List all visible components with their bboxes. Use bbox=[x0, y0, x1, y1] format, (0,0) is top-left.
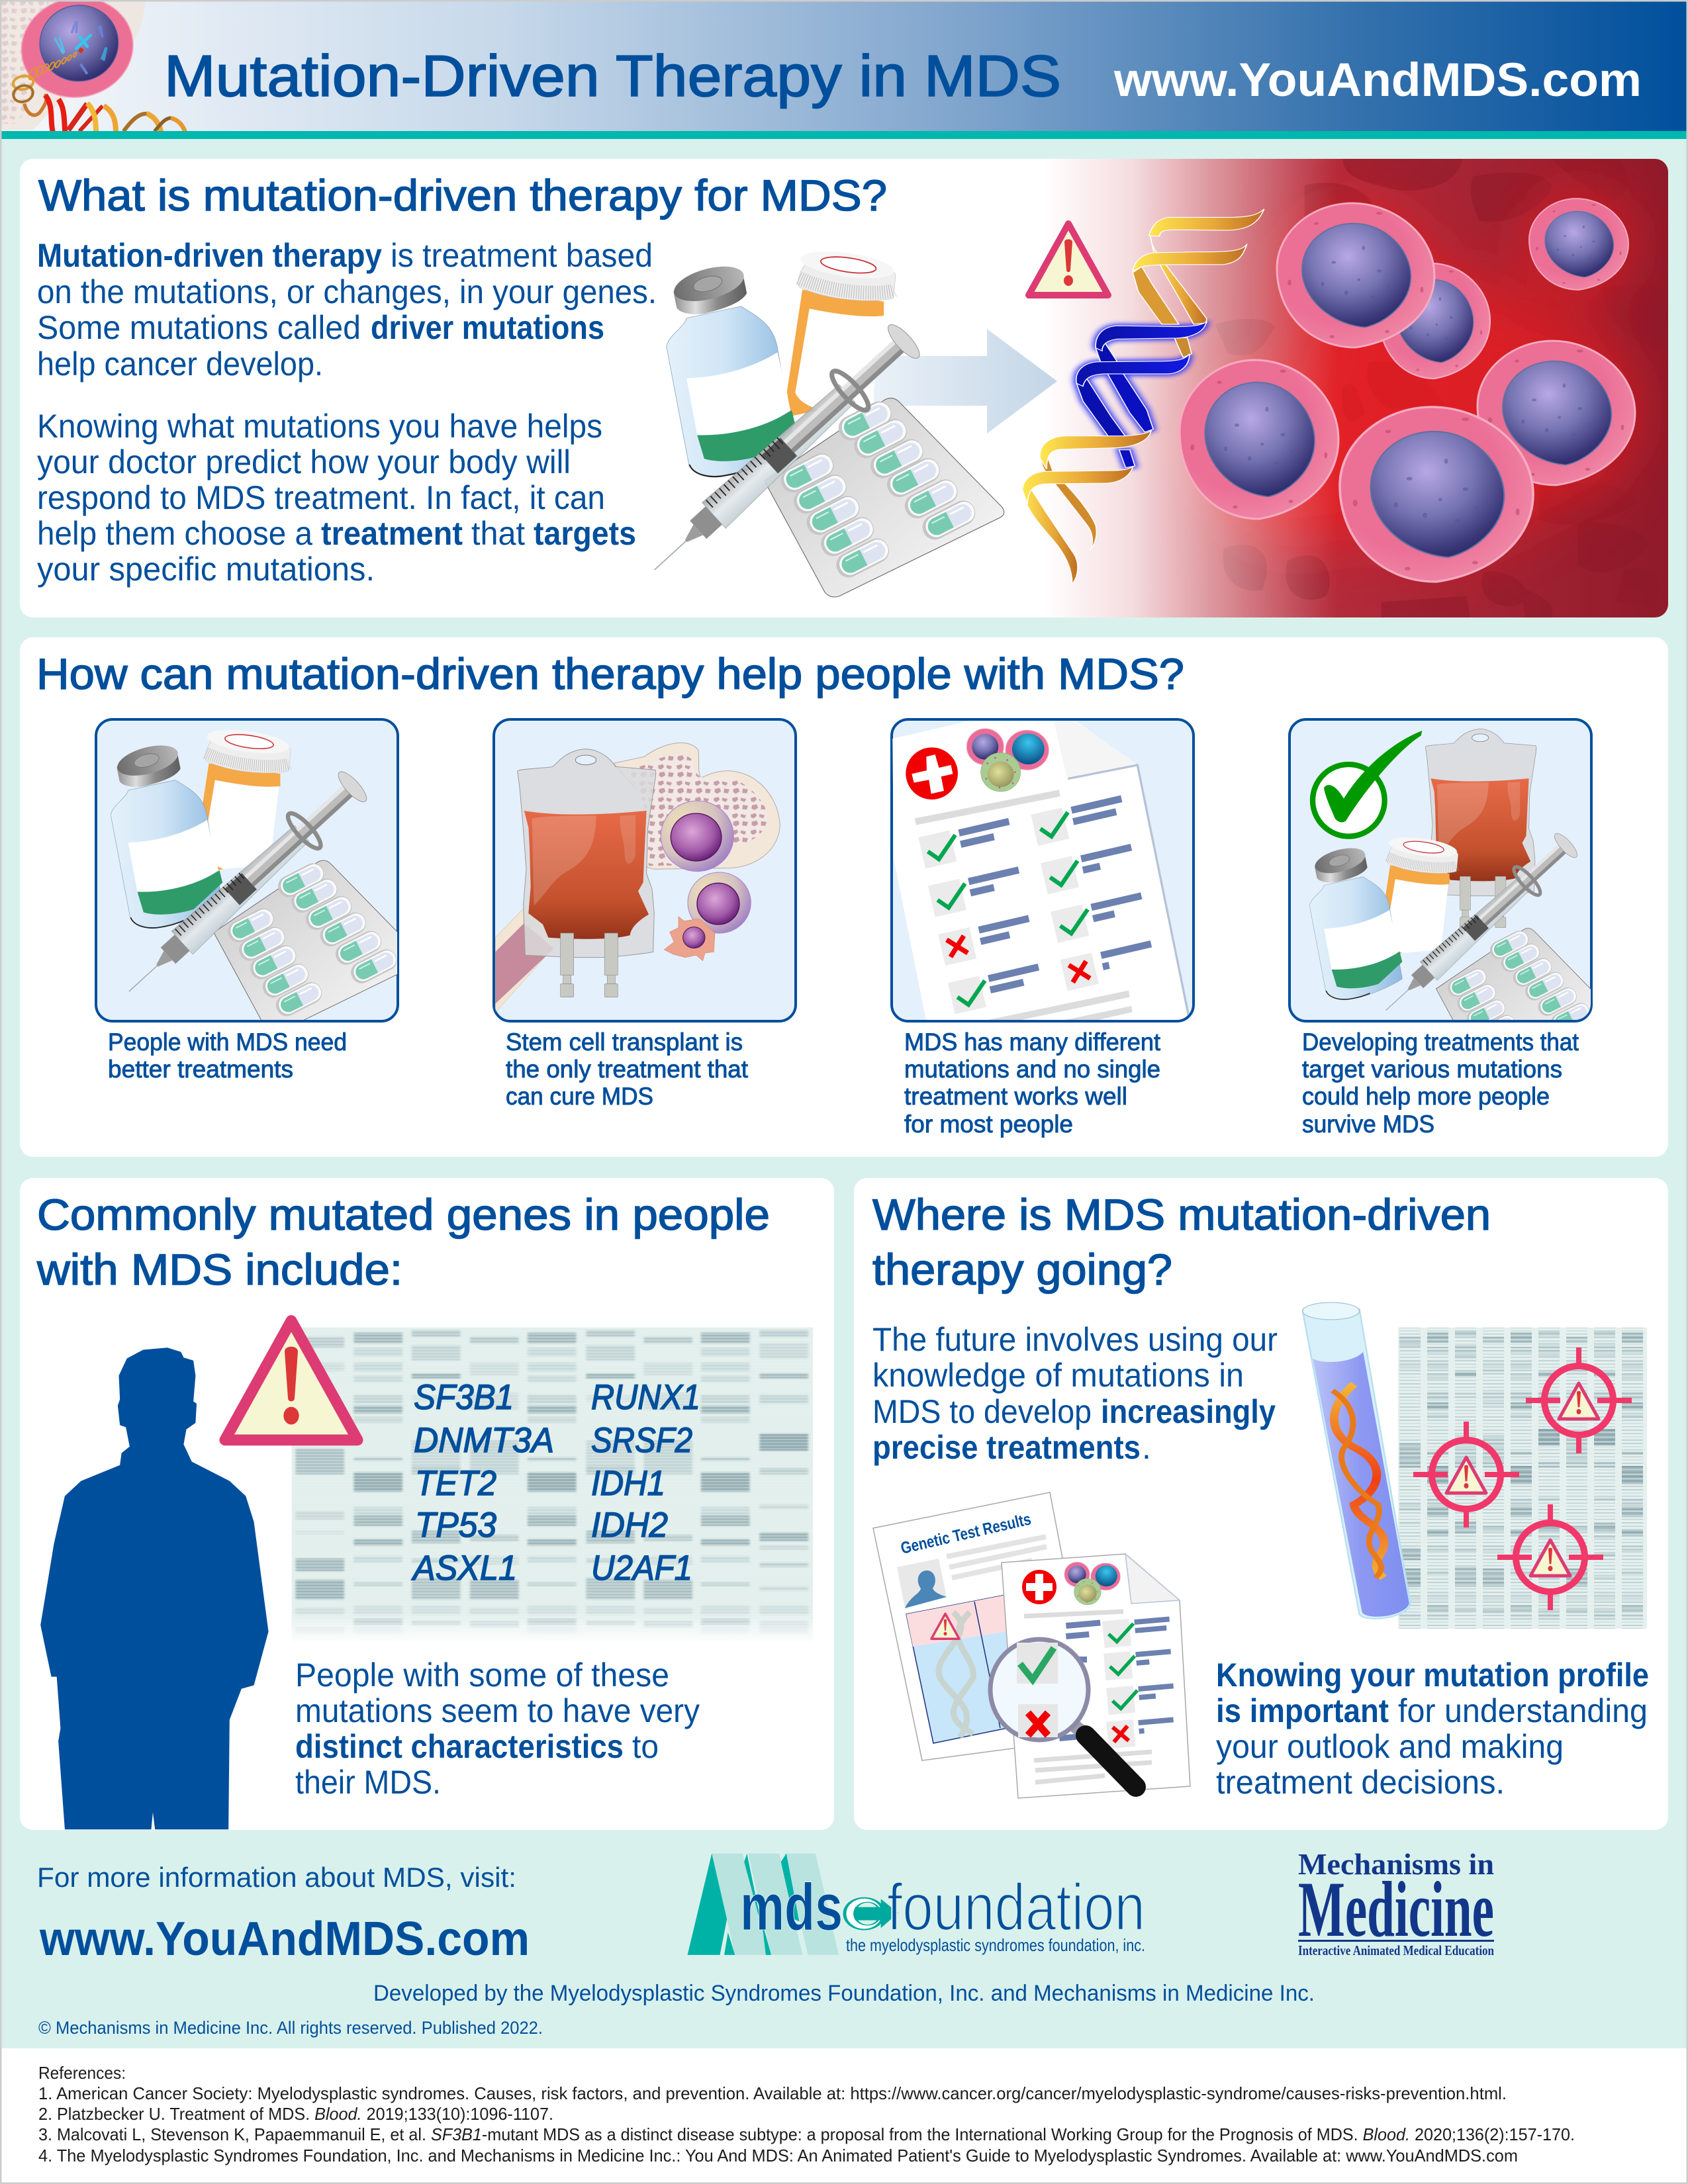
caption bbox=[108, 1028, 347, 1083]
text block: characteristics: to bbox=[632, 1728, 659, 1765]
references: 1. American Cancer Society: Myelodysplastic syndromes. Causes, risk factors, and prevention. Available at: https://www.cancer.org/cancer/myelodysplastic-syndrome/causes-risks-prevention.html. bbox=[38, 2083, 1507, 2103]
website address: www.YouAndMDS.com bbox=[1113, 54, 1642, 107]
icon: warning triangle bbox=[1029, 224, 1108, 295]
card: many different mutations bbox=[892, 719, 1194, 1138]
text block: why mutations matter: Knowing what mutations you have helps bbox=[37, 408, 602, 445]
illustration: genetic test results and magnifier: Genetic Test Results bbox=[899, 1510, 1033, 1558]
heading: What is mutation-driven therapy for MDS? bbox=[38, 171, 887, 220]
caption: could help more people bbox=[1302, 1083, 1550, 1110]
text block: definition: help cancer develop. bbox=[37, 345, 323, 383]
text block: definition bbox=[37, 237, 657, 383]
header banner bbox=[0, 0, 1688, 132]
text block: why mutations matter: help them choose a bbox=[37, 515, 312, 552]
caption: MDS has many different bbox=[904, 1028, 1161, 1056]
caption: better treatments bbox=[108, 1056, 293, 1083]
text block: the future: precise treatments bbox=[872, 1429, 1141, 1466]
caption: target various mutations bbox=[1302, 1056, 1562, 1083]
caption: People with MDS need bbox=[108, 1028, 347, 1056]
text block: characteristics: their MDS. bbox=[295, 1764, 441, 1801]
card: stem cell transplant bbox=[494, 719, 796, 1110]
panel: where is therapy going bbox=[854, 1178, 1668, 1830]
logo: Mechanisms in Medicine: Interactive Animated Medical Education bbox=[1298, 1942, 1494, 1958]
logo: MDS Foundation: mds bbox=[740, 1870, 843, 1944]
developer credit: Developed by the Myelodysplastic Syndromes Foundation, Inc. and Mechanisms in Medicine Inc. bbox=[373, 1981, 1315, 2006]
heading: Commonly mutated genes in people bbox=[37, 1190, 770, 1239]
heading: therapy going? bbox=[872, 1245, 1172, 1294]
references: 4. The Myelodysplastic Syndromes Foundation, Inc. and Mechanisms in Medicine Inc.: You And MDS: An Animated Patient's Guide to Myelodysplastic Syndromes. Available at: www.YouAndMDS.com bbox=[38, 2146, 1518, 2165]
gel electrophoresis pattern bbox=[286, 1328, 818, 1645]
icon: target one bbox=[1526, 1347, 1632, 1453]
person silhouette bbox=[40, 1347, 269, 1829]
gene list: RUNX1 bbox=[591, 1378, 700, 1417]
logo: MDS Foundation bbox=[688, 1854, 1145, 1955]
gene list: SF3B1 bbox=[414, 1378, 514, 1417]
red glow around cells bbox=[1198, 192, 1635, 549]
heading: How can mutation-driven therapy help people with MDS? bbox=[36, 649, 1184, 698]
text block: characteristics: distinct characteristics bbox=[295, 1728, 624, 1765]
logo: Mechanisms in Medicine: Mechanisms in bbox=[1298, 1847, 1494, 1881]
heading bbox=[872, 1190, 1491, 1294]
text block: definition: is treatment based bbox=[391, 237, 653, 274]
heading: with MDS include: bbox=[36, 1245, 402, 1294]
text block: definition: on the mutations, or changes, in your genes. bbox=[37, 273, 657, 310]
caption: Developing treatments that bbox=[1302, 1028, 1579, 1056]
text block: the future: MDS to develop bbox=[872, 1393, 1092, 1430]
gene list: SRSF2 bbox=[591, 1421, 692, 1460]
illustration: mutated DNA ribbon bbox=[1022, 209, 1264, 584]
logo: MDS Foundation: the myelodysplastic syndromes foundation, inc. bbox=[846, 1935, 1145, 1955]
card: better treatments bbox=[96, 719, 422, 1083]
text block: why mutations matter: your doctor predict how your body will bbox=[37, 443, 571, 480]
arrow bbox=[874, 329, 1057, 433]
icon: target two bbox=[1413, 1422, 1519, 1527]
magnifier bbox=[990, 1639, 1136, 1787]
heading bbox=[36, 1190, 770, 1294]
caption: the only treatment that bbox=[506, 1056, 749, 1083]
icon: warning triangle bbox=[225, 1320, 357, 1440]
gene list bbox=[411, 1378, 700, 1588]
title: Mutation-Driven Therapy in MDS bbox=[164, 43, 1061, 109]
caption: survive MDS bbox=[1302, 1111, 1434, 1138]
text block: why mutations matter: that bbox=[471, 515, 525, 552]
references: 3. Malcovati L, Stevenson K, Papaemmanuil E, et al. SF3B1-mutant MDS as a distinct disease subtype: a proposal from the International Working Group for the Prognosis of MDS. Blood. 2020;136(2):157-170. bbox=[38, 2124, 1575, 2144]
text block: mutation profile: for understanding bbox=[1398, 1692, 1648, 1729]
icon: blood bag, bone and stem cells bbox=[495, 743, 780, 1013]
gel pattern with targets bbox=[1398, 1328, 1647, 1629]
text block: the future: increasingly bbox=[1101, 1393, 1276, 1430]
caption: treatment works well bbox=[904, 1083, 1127, 1110]
text block: mutation profile: your outlook and making bbox=[1216, 1728, 1564, 1765]
caption bbox=[1302, 1028, 1579, 1138]
illustration: medications bbox=[637, 247, 1004, 597]
caption: for most people bbox=[904, 1111, 1073, 1138]
text block: why mutations matter: your specific mutations. bbox=[37, 551, 375, 588]
references: References: bbox=[38, 2063, 126, 2083]
card: developing treatments bbox=[1289, 719, 1611, 1138]
gene list: ASXL1 bbox=[411, 1549, 517, 1588]
text block: the future: knowledge of mutations in bbox=[872, 1357, 1244, 1394]
gene list: TP53 bbox=[415, 1506, 496, 1545]
test tube with DNA bbox=[1303, 1302, 1410, 1619]
text block: mutation profile: is important bbox=[1216, 1692, 1389, 1729]
icon: mutated cell with DNA bbox=[0, 0, 185, 132]
references bbox=[0, 2048, 1688, 2184]
text block: characteristics: People with some of these bbox=[295, 1657, 669, 1694]
gene list: IDH1 bbox=[591, 1464, 665, 1503]
logo: Mechanisms in Medicine bbox=[1298, 1847, 1494, 1958]
copyright: © Mechanisms in Medicine Inc. All rights reserved. Published 2022. bbox=[38, 2018, 543, 2038]
text block: definition: driver mutations bbox=[371, 309, 604, 346]
text block: mutation profile: treatment decisions. bbox=[1216, 1764, 1505, 1801]
text block: definition: Mutation-driven therapy bbox=[37, 237, 382, 274]
text block: the future bbox=[872, 1321, 1278, 1466]
text block: mutation profile: Knowing your mutation profile bbox=[1216, 1657, 1649, 1694]
text block: mutation profile bbox=[1216, 1657, 1649, 1801]
text block: the future: The future involves using our bbox=[872, 1321, 1278, 1358]
panel: commonly mutated genes bbox=[20, 1178, 834, 1830]
caption: Stem cell transplant is bbox=[506, 1028, 743, 1056]
logo: Mechanisms in Medicine: Medicine bbox=[1298, 1865, 1494, 1953]
text block: why mutations matter: respond to MDS treatment. In fact, it can bbox=[37, 479, 605, 516]
logo: MDS Foundation: foundation bbox=[887, 1870, 1145, 1944]
caption bbox=[506, 1028, 749, 1110]
gene list: U2AF1 bbox=[591, 1549, 692, 1588]
caption: can cure MDS bbox=[506, 1083, 653, 1110]
more information block: For more information about MDS, visit: bbox=[37, 1862, 516, 1893]
illustration: cancer cells bbox=[1180, 199, 1635, 582]
panel: how can therapy help bbox=[20, 637, 1668, 1157]
icon: test result document bbox=[892, 719, 1190, 1024]
text block: why mutations matter: treatment bbox=[321, 515, 463, 552]
heading: Where is MDS mutation-driven bbox=[872, 1190, 1491, 1239]
caption bbox=[904, 1028, 1161, 1138]
text block: why mutations matter: targets bbox=[534, 515, 636, 552]
panel: what is mutation-driven therapy bbox=[20, 152, 1675, 622]
text block: the future: . bbox=[1142, 1429, 1151, 1466]
caption: mutations and no single bbox=[904, 1056, 1160, 1083]
text block: characteristics: mutations seem to have very bbox=[295, 1692, 700, 1729]
gene list: TET2 bbox=[415, 1464, 496, 1503]
text block: definition: Some mutations called bbox=[37, 309, 361, 346]
icon: target three bbox=[1497, 1504, 1603, 1610]
icon: check with therapies bbox=[1309, 729, 1611, 1073]
text block: why mutations matter bbox=[37, 408, 636, 588]
red cell background bbox=[1064, 159, 1668, 617]
website link: www.YouAndMDS.com bbox=[39, 1913, 530, 1966]
icon: medications bbox=[111, 730, 397, 1020]
text block: characteristics bbox=[295, 1657, 700, 1801]
illustration: genetic test results and magnifier bbox=[873, 1492, 1190, 1798]
more information block bbox=[37, 1862, 530, 1966]
gene list: IDH2 bbox=[591, 1506, 668, 1545]
gene list: DNMT3A bbox=[414, 1421, 554, 1460]
references: 2. Platzbecker U. Treatment of MDS. Blood. 2019;133(10):1096-1107. bbox=[38, 2104, 553, 2124]
